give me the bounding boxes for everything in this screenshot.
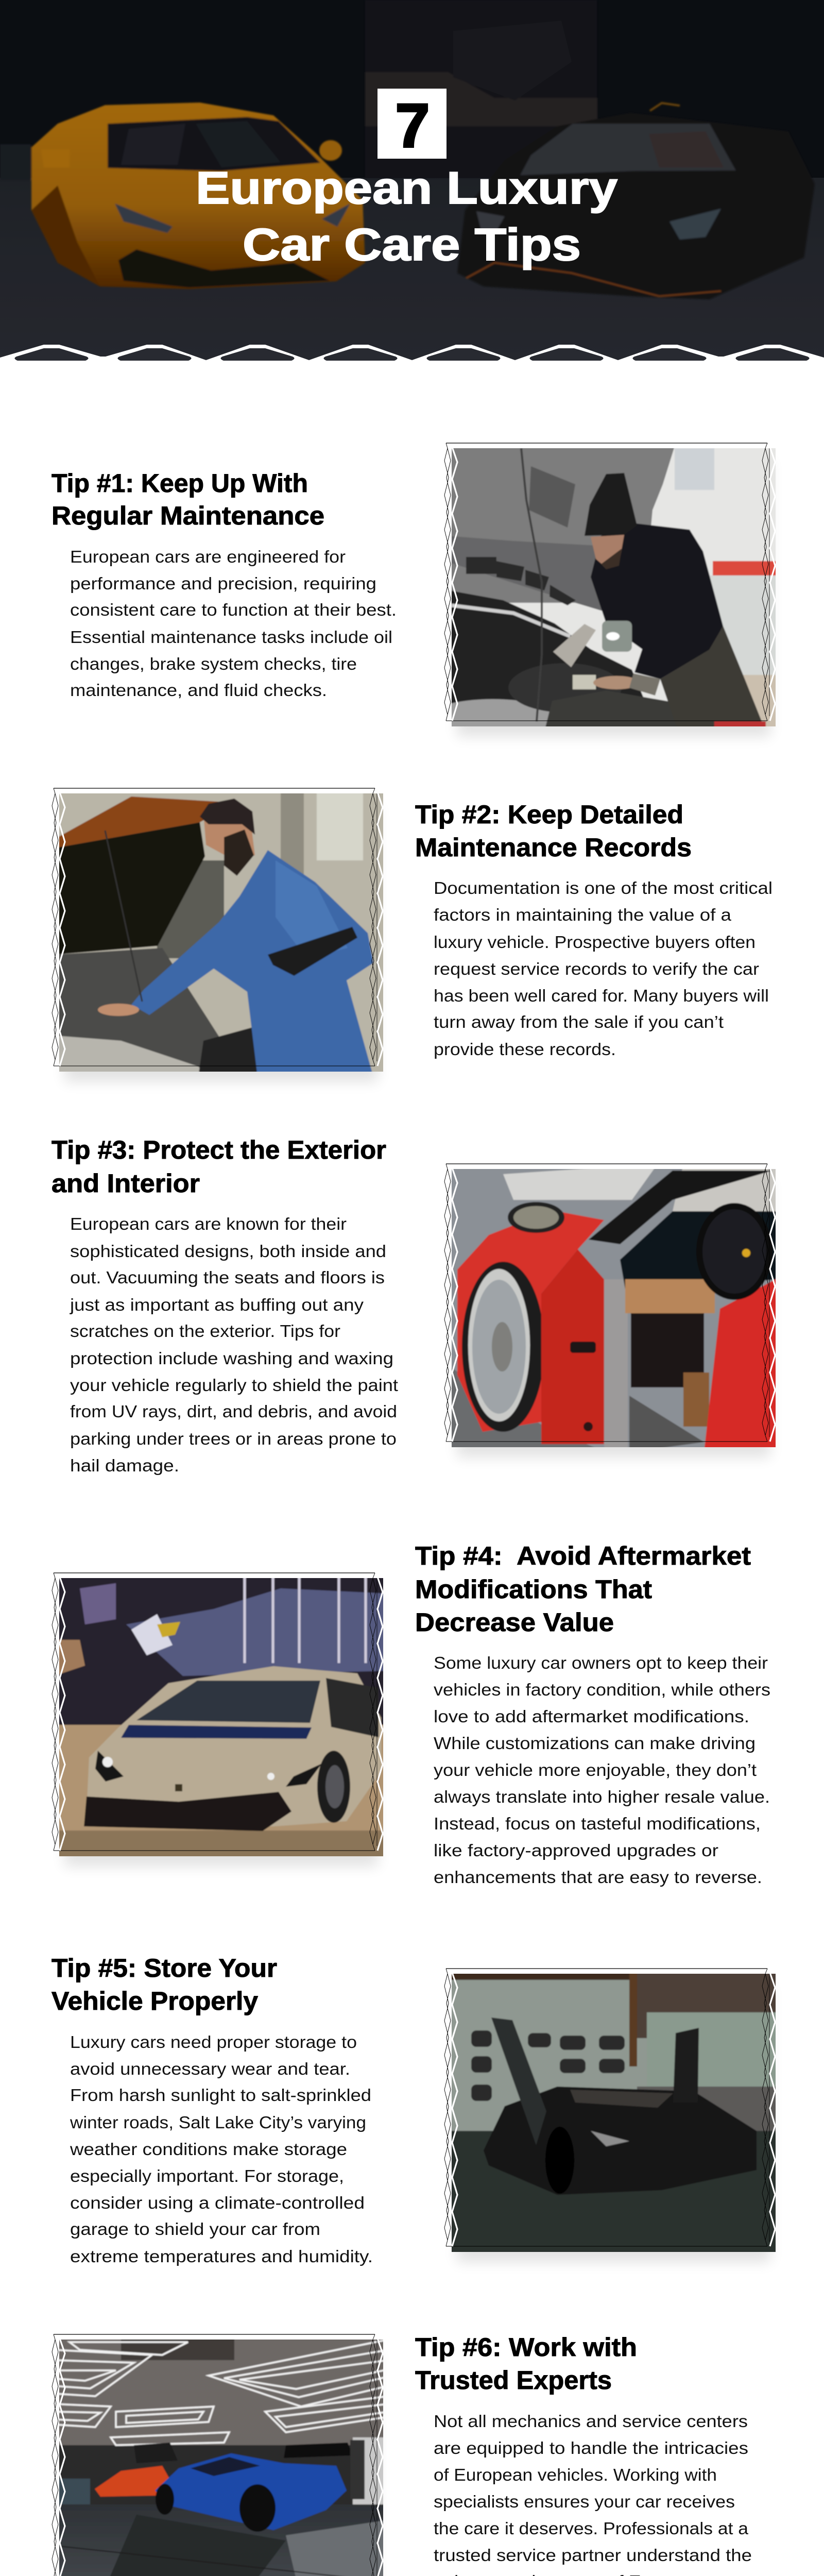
tip 2 heading: Tip #2: Keep Detailed <box>415 800 683 829</box>
tip 5 heading: Tip #5: Store Your <box>52 1954 277 1982</box>
tip 4 heading: Modifications That <box>415 1575 652 1604</box>
tip 6 heading: Tip #6: Work with <box>415 2333 637 2362</box>
tip 3 body text: out. Vacuuming the seats and floors is <box>70 1268 385 1287</box>
tip 2 photo: mechanic in blue suit <box>52 788 388 1082</box>
tip 5 body text: winter roads, Salt Lake City’s varying <box>70 2113 366 2132</box>
tip 6 body text: Not all mechanics and service centers <box>434 2412 748 2431</box>
tip 1 heading: Tip #1: Keep Up With <box>52 469 308 498</box>
panel: tip 2 <box>52 788 772 1082</box>
tip 3 heading <box>52 1136 386 1198</box>
tip 5 body text: extreme temperatures and humidity. <box>70 2247 373 2266</box>
tip 5 body text: weather conditions make storage <box>70 2140 347 2159</box>
title: Car Care Tips <box>243 219 581 270</box>
zigzag header edge <box>0 345 824 362</box>
tip 4 body text: While customizations can make driving <box>434 1734 756 1753</box>
tip 6 body text: the care it deserves. Professionals at a <box>434 2519 748 2538</box>
tip 3 body text: hail damage. <box>70 1456 179 1476</box>
tip 2 body text: has been well cared for. Many buyers will <box>434 987 769 1006</box>
tip 5 photo: black Lamborghini in garage <box>444 1969 781 2262</box>
tip 1 body text: performance and precision, requiring <box>70 574 376 594</box>
tip 5 body text: especially important. For storage, <box>70 2167 344 2186</box>
number badge 7: 7 <box>396 91 430 160</box>
panel: tip 3 <box>52 1136 781 1476</box>
tip 4 body text: enhancements that are easy to reverse. <box>434 1868 762 1887</box>
tip 4 heading: Tip #4: Avoid Aftermarket <box>415 1541 751 1570</box>
tip 2 body text: luxury vehicle. Prospective buyers often <box>434 933 756 952</box>
tip 4 body text: love to add aftermarket modifications. <box>434 1707 749 1726</box>
tip 1 body text: consistent care to function at their best. <box>70 601 397 620</box>
tip 4 body text: always translate into higher resale value. <box>434 1788 770 1807</box>
tip 5 heading <box>52 1954 277 2015</box>
tip 6 heading: Trusted Experts <box>415 2366 612 2395</box>
tip 2 body text: turn away from the sale if you can’t <box>434 1013 724 1032</box>
number badge 7 <box>377 89 447 160</box>
tip 3 body text: just as important as buffing out any <box>70 1296 364 1315</box>
tip 3 body text <box>70 1215 399 1476</box>
tip 4 body text <box>434 1654 770 1887</box>
tip 2 body text <box>434 879 772 1059</box>
panel: tip 5 <box>52 1954 781 2266</box>
tip 2 heading <box>415 800 692 862</box>
tip 3 body text: protection include washing and waxing <box>70 1349 393 1368</box>
tip 6 heading <box>415 2333 637 2395</box>
tip 5 heading: Vehicle Properly <box>52 1987 258 2015</box>
tip 2 body text: request service records to verify the car <box>434 960 759 979</box>
tip 3 heading: and Interior <box>52 1169 200 1198</box>
tip 3 body text: your vehicle regularly to shield the paint <box>70 1376 399 1395</box>
panel: tip 1 <box>52 443 781 738</box>
tip 6 body text: are equipped to handle the intricacies <box>434 2439 748 2458</box>
tip 6 body text: of European vehicles. Working with <box>434 2466 717 2485</box>
tip 3 body text: sophisticated designs, both inside and <box>70 1242 386 1261</box>
tip 4 body text: Instead, focus on tasteful modifications, <box>434 1815 761 1834</box>
tip 1 body text <box>70 548 397 700</box>
tip 6 photo: blue car in neon-lit detailing garage <box>52 2334 388 2576</box>
tip 1 body text: changes, brake system checks, tire <box>70 655 357 674</box>
tip 1 heading: Regular Maintenance <box>52 501 324 530</box>
tip 5 body text: consider using a climate-controlled <box>70 2194 365 2213</box>
title: European Luxury <box>196 162 617 213</box>
panel: tip 6 <box>52 2333 752 2576</box>
tip 1 heading <box>52 469 324 530</box>
tip 5 body text: From harsh sunlight to salt-sprinkled <box>70 2086 371 2105</box>
tip 1 body text: Essential maintenance tasks include oil <box>70 628 392 647</box>
tip 3 body text: parking under trees or in areas prone to <box>70 1430 397 1449</box>
tip 3 body text: from UV rays, dirt, and debris, and avoid <box>70 1402 397 1421</box>
tip 3 heading: Tip #3: Protect the Exterior <box>52 1136 386 1164</box>
tip 2 body text: Documentation is one of the most critical <box>434 879 772 898</box>
header photo: two sports cars in dark garage <box>0 0 824 361</box>
tip 2 body text: provide these records. <box>434 1040 616 1059</box>
tip 4 body text: Some luxury car owners opt to keep their <box>434 1654 768 1673</box>
tip 4 heading <box>415 1541 751 1637</box>
tip 6 body text: specialists ensures your car receives <box>434 2493 735 2512</box>
tip 3 photo: red sports car door open <box>444 1164 781 1458</box>
tip 5 body text <box>70 2033 373 2266</box>
tip 3 body text: European cars are known for their <box>70 1215 347 1234</box>
tip 2 heading: Maintenance Records <box>415 833 692 862</box>
tip 4 body text: your vehicle more enjoyable, they don’t <box>434 1761 757 1780</box>
panel: header <box>0 0 824 362</box>
tip 2 body text: factors in maintaining the value of a <box>434 906 731 925</box>
tip 6 body text: trusted service partner understand the <box>434 2546 752 2565</box>
tip 5 body text: avoid unnecessary wear and tear. <box>70 2060 350 2079</box>
title <box>196 162 617 270</box>
tip 6 body text <box>434 2412 752 2576</box>
tip 3 body text: scratches on the exterior. Tips for <box>70 1322 340 1341</box>
tip 1 body text: maintenance, and fluid checks. <box>70 681 327 700</box>
tip 5 body text: garage to shield your car from <box>70 2220 320 2239</box>
tip 4 heading: Decrease Value <box>415 1608 614 1637</box>
tip 4 body text: like factory-approved upgrades or <box>434 1841 718 1860</box>
tip 4 photo: beige Lamborghini by graffiti wall <box>52 1573 388 1867</box>
tip 4 body text: vehicles in factory condition, while others <box>434 1681 770 1700</box>
tip 1 body text: European cars are engineered for <box>70 548 346 567</box>
tip 5 body text: Luxury cars need proper storage to <box>70 2033 357 2052</box>
panel: tip 4 <box>52 1541 770 1887</box>
tip 1 photo: mechanic under hood <box>426 443 781 738</box>
